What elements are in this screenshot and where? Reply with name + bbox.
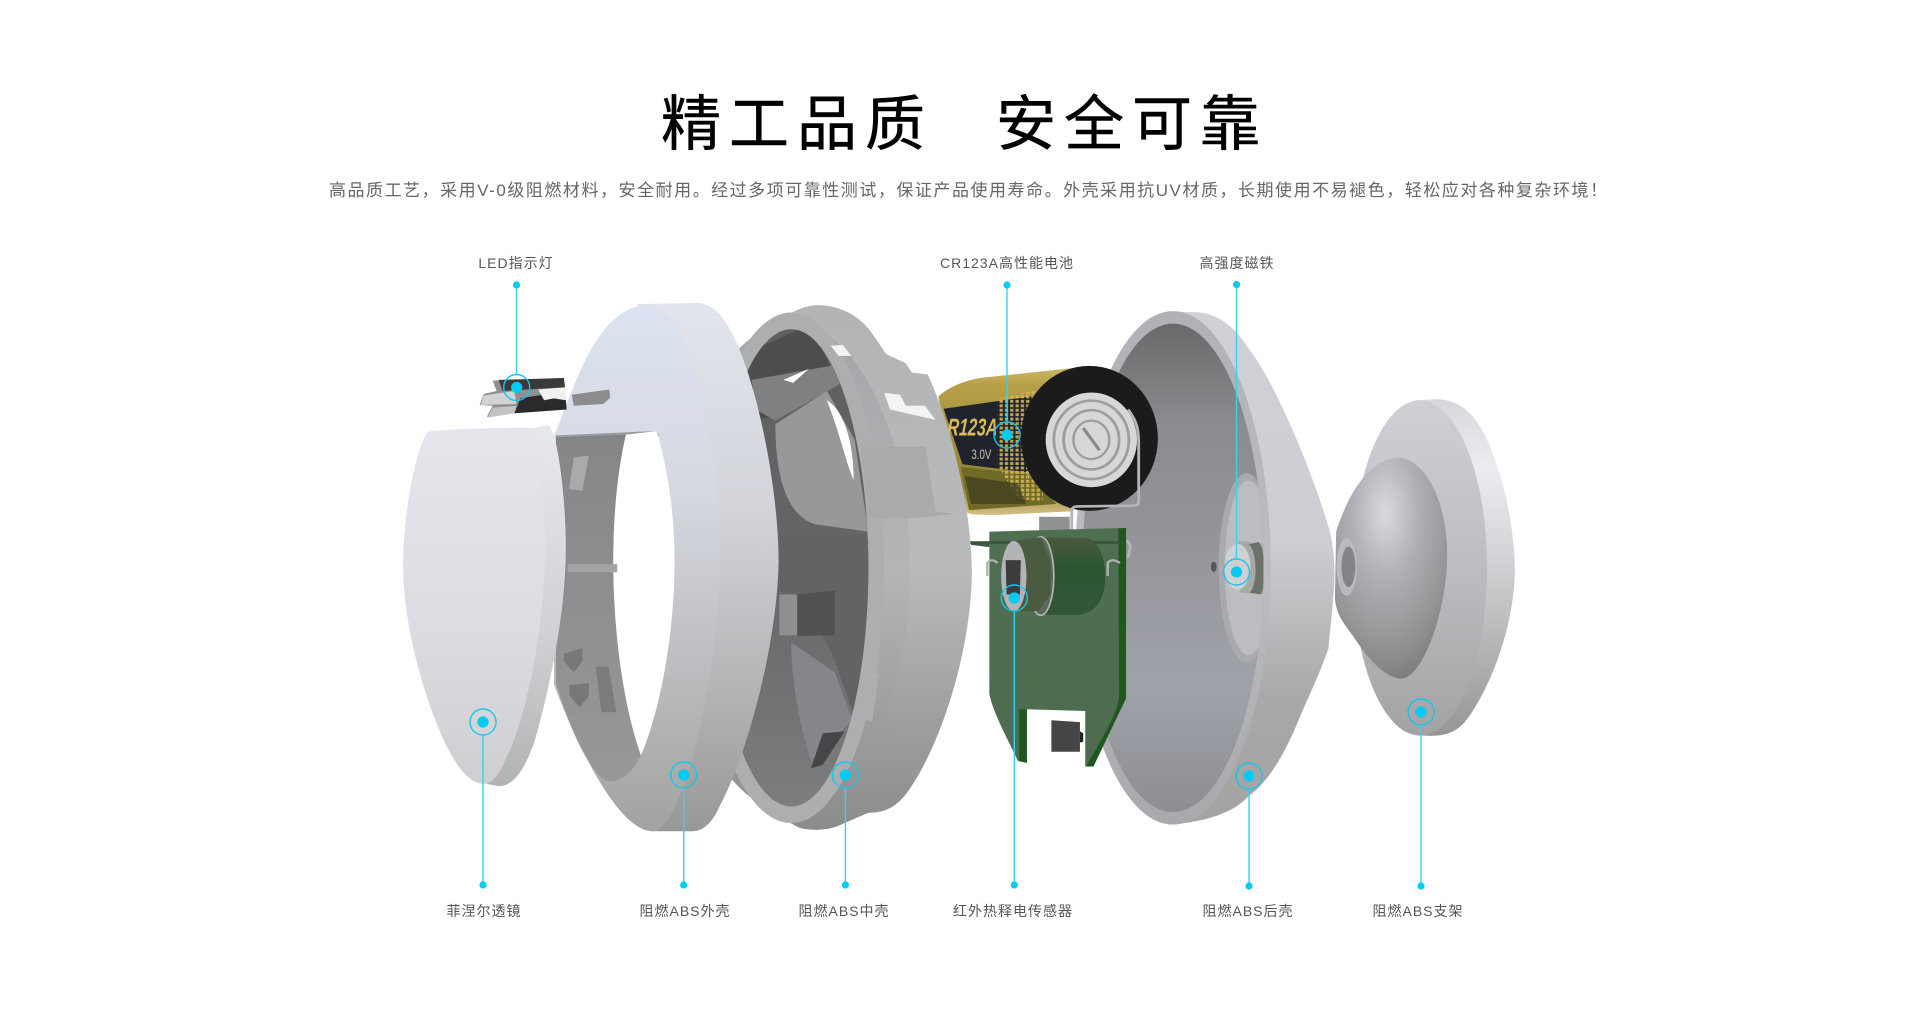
- label: bracket: 阻燃ABS支架: [1372, 903, 1464, 919]
- part: ABS outer shell: [554, 303, 779, 831]
- title: 精工品质: [661, 91, 933, 158]
- label: battery: CR123A高性能电池: [940, 255, 1074, 271]
- label: middle shell: 阻燃ABS中壳: [798, 903, 890, 919]
- battery label text: R123A: [947, 414, 999, 441]
- part: ABS middle shell: [732, 305, 972, 830]
- title: 安全可靠: [996, 91, 1268, 158]
- subtitle text: 高品质工艺，采用V-0级阻燃材料，安全耐用。经过多项可靠性测试，保证产品使用寿命。外壳采用抗UV材质，长期使用不易褪色，轻松应对各种复杂环境！: [329, 180, 1607, 200]
- callout: battery: [940, 255, 1074, 448]
- label: infrared sensor: 红外热释电传感器: [953, 903, 1073, 919]
- part: CR123A battery: [938, 366, 1158, 558]
- callout: bracket: [1372, 699, 1464, 919]
- label: Fresnel lens: 菲涅尔透镜: [446, 903, 522, 919]
- part: LED indicator: [480, 378, 567, 418]
- part: ABS bracket: [1335, 399, 1515, 736]
- part: ABS rear shell: [1075, 311, 1335, 825]
- label: rear shell: 阻燃ABS后壳: [1202, 903, 1294, 919]
- label: magnet: 高强度磁铁: [1200, 255, 1274, 271]
- part: Fresnel lens: [403, 425, 566, 786]
- callout: rear shell: [1202, 763, 1294, 919]
- part: CR123A battery: 3.0V: [971, 448, 992, 463]
- label: LED: LED指示灯: [478, 255, 554, 271]
- callout: Fresnel lens: [446, 709, 522, 919]
- callout: magnet: [1200, 255, 1274, 585]
- exploded product illustration: [403, 303, 1515, 831]
- callout: infrared sensor: [953, 585, 1073, 919]
- callout: LED indicator: [478, 255, 554, 400]
- label: outer shell: 阻燃ABS外壳: [639, 903, 731, 919]
- title: [661, 91, 1268, 158]
- callout: outer shell: [639, 762, 731, 919]
- part: PCB with infrared sensor: [969, 517, 1126, 767]
- callout: middle shell: [798, 762, 890, 919]
